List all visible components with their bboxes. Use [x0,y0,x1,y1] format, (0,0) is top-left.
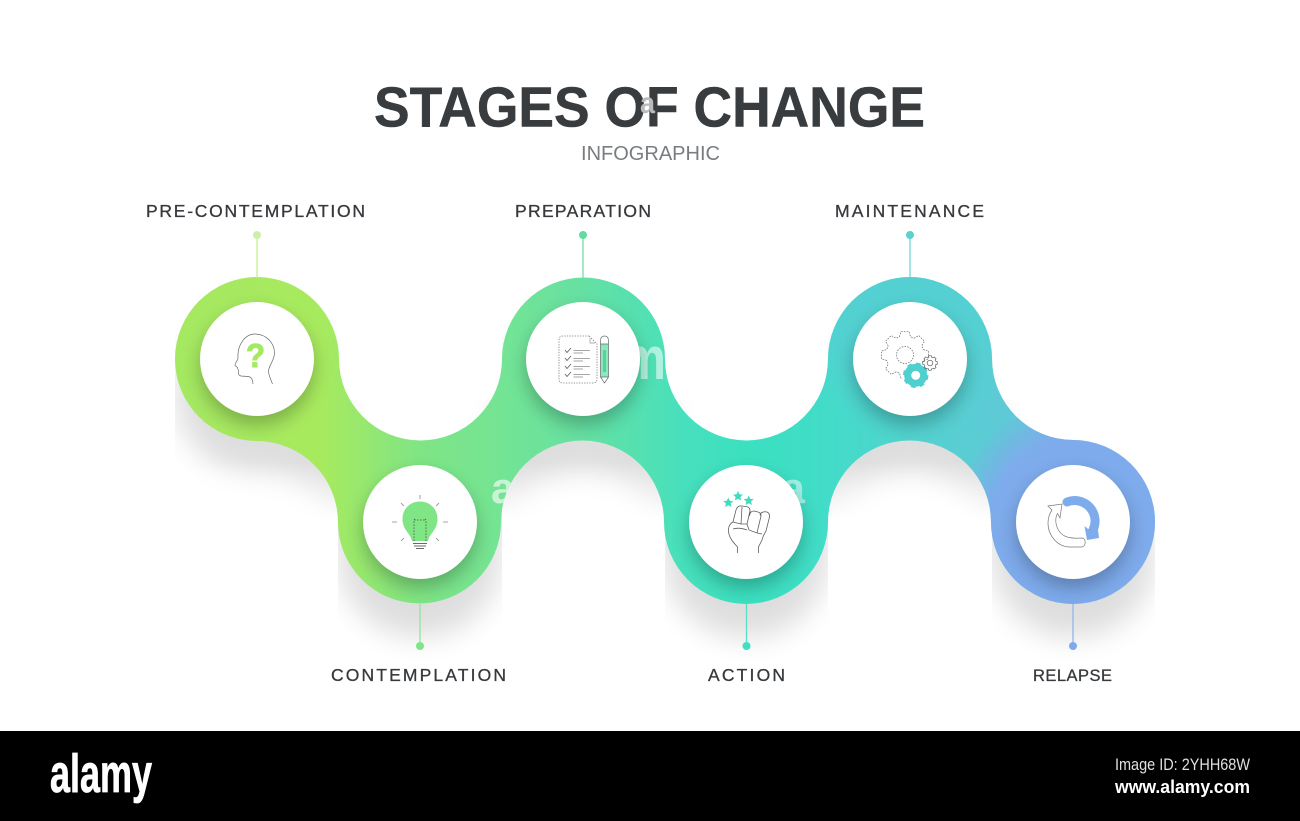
icon: checklist and pencil [559,336,608,383]
stage 1: pre-contemplation [146,201,365,416]
icon: head with question mark [235,334,274,384]
connector: preparation [579,231,587,278]
label: maintenance: MAINTENANCE [835,201,984,221]
icon: gears [882,332,937,389]
watermark fragments on ribbon: a [781,464,806,513]
footer image id: Image ID: 2YHH68W [1115,755,1250,774]
footer url: www.alamy.com [1114,777,1250,797]
white disc [200,302,314,416]
stage 2: contemplation [331,465,506,685]
label: relapse: RELAPSE [1033,667,1112,685]
watermark fragments on ribbon [492,346,806,504]
label: action: ACTION [708,665,785,685]
subtitle: INFOGRAPHIC [581,143,720,165]
white disc [689,465,803,579]
connector: contemplation [416,604,424,650]
icon: cycle arrows [1048,501,1099,547]
connector: pre-contemplation [253,231,261,278]
connector: action [742,604,750,650]
white disc [363,465,477,579]
stage 6: relapse [1016,465,1130,685]
title: STAGES OF CHANGE [374,76,925,140]
icon: light bulb [392,495,448,548]
white disc [1016,465,1130,579]
connector: relapse [1069,604,1077,650]
label: contemplation: CONTEMPLATION [331,665,506,685]
circle shadows [200,311,1130,588]
icon: head with question mark: ? [246,337,265,374]
watermark fragment on title: a [640,87,655,120]
ribbon shadow [175,366,1155,646]
white disc [853,302,967,416]
connector: maintenance [906,231,914,278]
footer bar [0,731,1300,821]
serpentine ribbon [175,277,1155,604]
stage 4: action [689,465,803,685]
stage 5: maintenance [835,201,984,416]
stage 3: preparation [515,201,651,416]
white disc [526,302,640,416]
label: preparation: PREPARATION [515,201,651,221]
icon: raised fist with stars [723,491,770,553]
watermark fragments on ribbon: a [491,464,516,513]
footer logo: alamy [50,744,152,804]
watermark fragments on ribbon: m [622,325,666,392]
label: pre-contemplation: PRE-CONTEMPLATION [146,201,365,221]
